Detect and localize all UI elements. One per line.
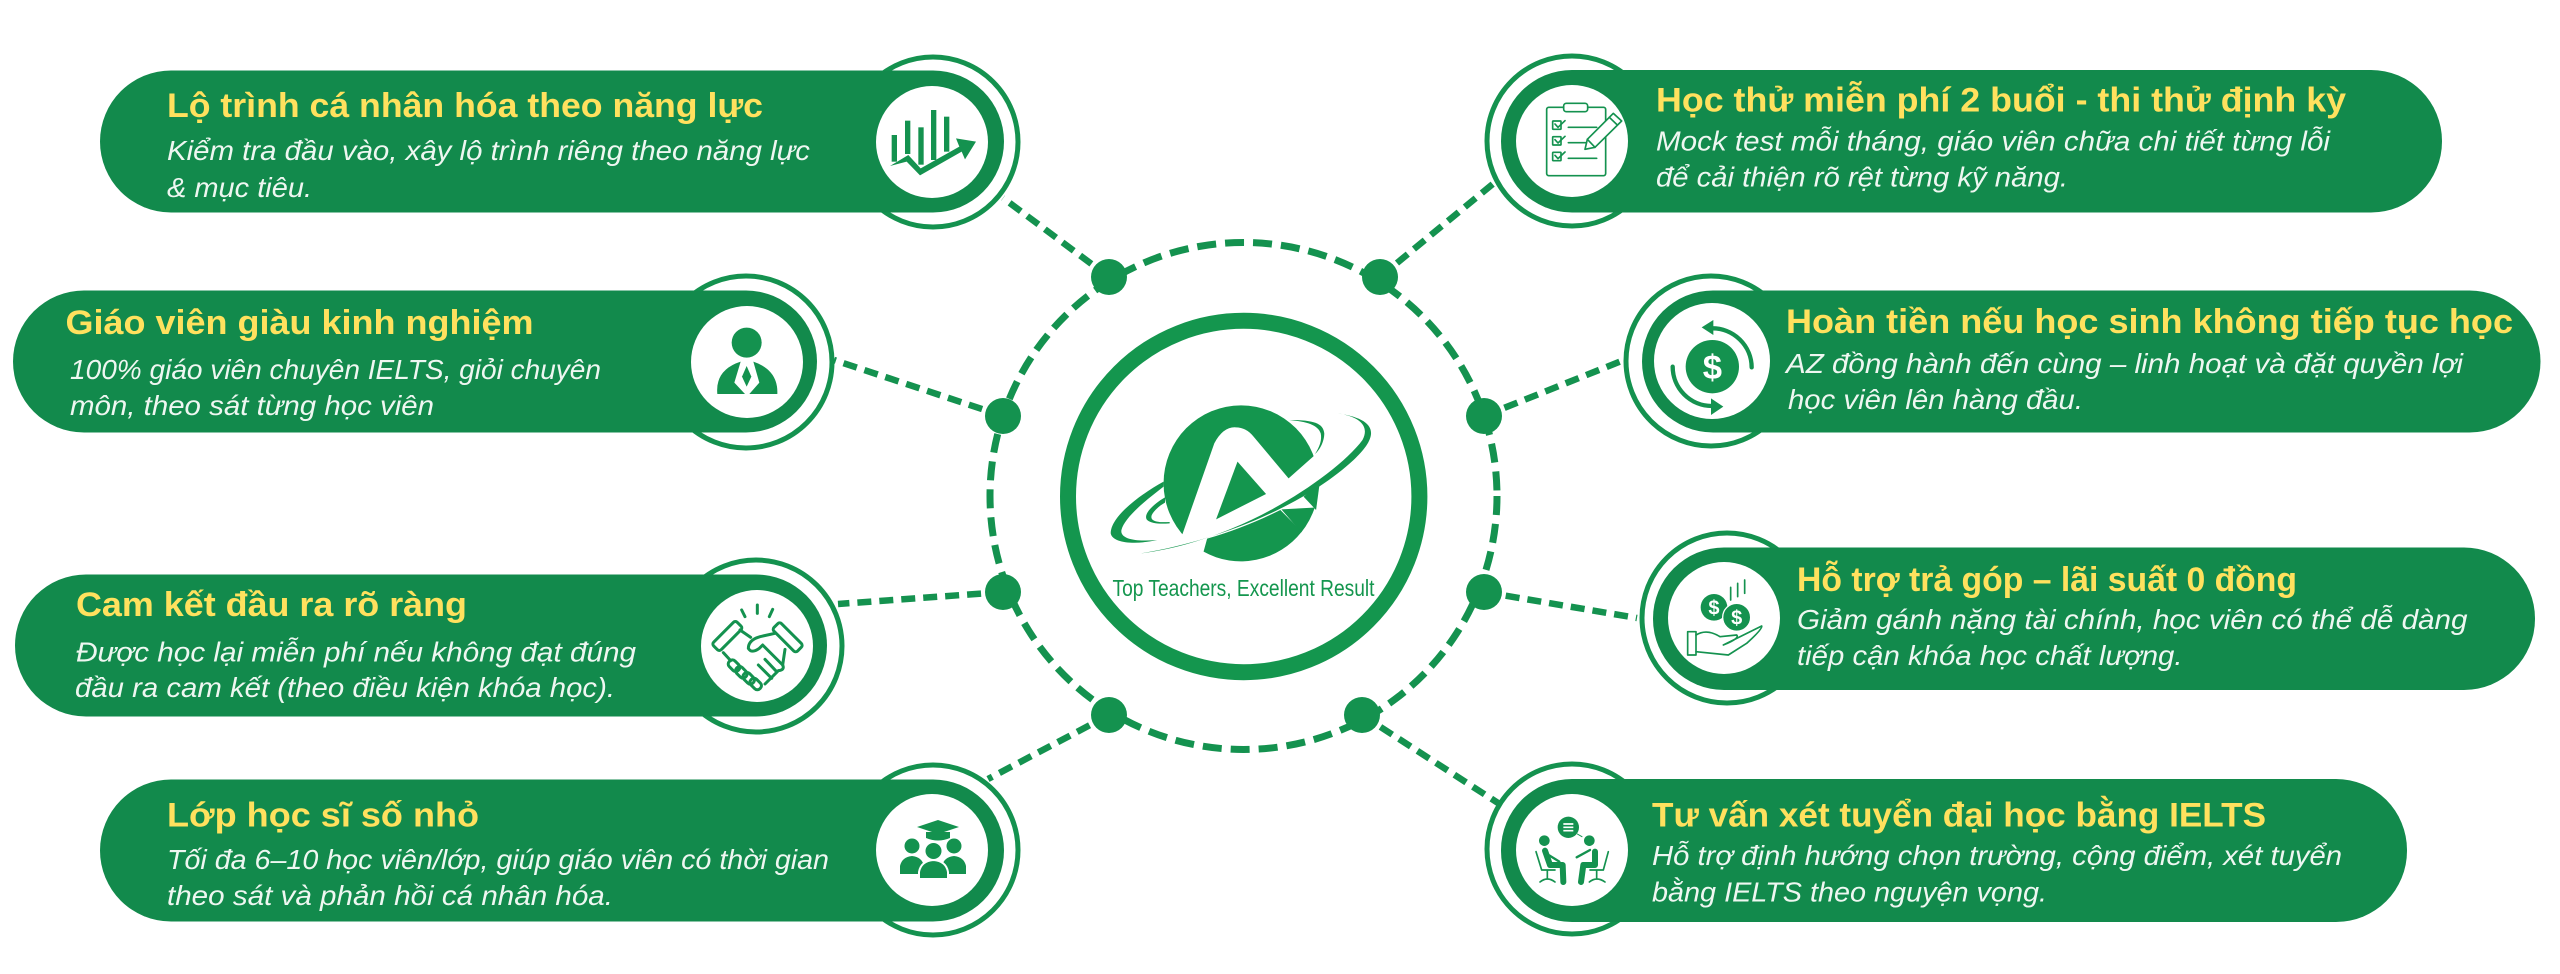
description: Kiểm tra đầu vào, xây lộ trình riêng theo năng lực <box>167 135 810 166</box>
description: & mục tiêu. <box>167 172 312 203</box>
description: 100% giáo viên chuyên IELTS, giỏi chuyên <box>70 354 601 385</box>
description: theo sát và phản hồi cá nhân hóa. <box>167 880 613 911</box>
panel: installment support <box>1642 533 2535 703</box>
description: bằng IELTS theo nguyện vọng. <box>1652 876 2047 908</box>
description: Mock test mỗi tháng, giáo viên chữa chi tiết từng lỗi <box>1656 126 2331 156</box>
panel: personalised roadmap <box>100 57 1018 227</box>
dashed connectors from hub to panels <box>834 183 1637 803</box>
description: môn, theo sát từng học viên <box>70 390 434 421</box>
icon: coins in hand: $ <box>1731 608 1742 630</box>
heading: Tư vấn xét tuyển đại học bằng IELTS <box>1652 796 2266 834</box>
icon: coins in hand <box>1688 580 1762 655</box>
icon: consultation <box>1536 817 1608 882</box>
description: học viên lên hàng đầu. <box>1788 384 2083 415</box>
description <box>1797 604 2468 671</box>
heading: Lớp học sĩ số nhỏ <box>167 796 479 834</box>
description <box>1652 840 2342 908</box>
description: AZ đồng hành đến cùng – linh hoạt và đặt quyền lợi <box>1784 348 2464 379</box>
description: Hỗ trợ định hướng chọn trường, cộng điểm, xét tuyển <box>1652 840 2342 871</box>
panel: refund policy <box>1626 276 2540 446</box>
heading: Hoàn tiền nếu học sinh không tiếp tục học <box>1786 303 2513 341</box>
icon: handshake <box>712 605 803 691</box>
heading: Cam kết đầu ra rõ ràng <box>76 586 467 624</box>
icon: money refund cycle: $ <box>1703 349 1722 387</box>
icon: rising chart <box>890 110 976 175</box>
description <box>70 354 601 421</box>
description: đầu ra cam kết (theo điều kiện khóa học). <box>75 672 615 703</box>
description: Được học lại miễn phí nếu không đạt đúng <box>76 636 636 668</box>
description: Tối đa 6–10 học viên/lớp, giúp giáo viên có thời gian <box>167 844 829 875</box>
description <box>75 636 636 703</box>
icon: money refund cycle <box>1673 320 1752 415</box>
icon: clipboard checklist <box>1547 103 1622 176</box>
logo slogan: Top Teachers, Excellent Result <box>1112 575 1375 601</box>
panel: university admission advice <box>1487 764 2407 934</box>
description <box>1656 126 2331 192</box>
description <box>167 135 810 203</box>
heading: Hỗ trợ trả góp – lãi suất 0 đồng <box>1797 561 2297 599</box>
panel: experienced teachers <box>13 276 832 448</box>
icon: students with graduation cap <box>900 820 966 879</box>
icon: teacher <box>717 328 777 394</box>
description: tiếp cận khóa học chất lượng. <box>1797 640 2182 671</box>
panel: small class size <box>100 765 1018 935</box>
panel: output commitment <box>15 560 842 732</box>
description: Giảm gánh nặng tài chính, học viên có thể dễ dàng <box>1797 604 2468 635</box>
central logo badge <box>1068 321 1419 672</box>
heading: Giáo viên giàu kinh nghiệm <box>66 304 534 342</box>
orbit nodes <box>985 259 1502 733</box>
description <box>167 844 829 911</box>
description <box>1784 348 2464 415</box>
logo mark <box>1111 405 1371 567</box>
heading: Học thử miễn phí 2 buổi - thi thử định kỳ <box>1656 82 2346 120</box>
dashed orbit ring <box>990 242 1497 750</box>
heading: Lộ trình cá nhân hóa theo năng lực <box>167 87 763 125</box>
panel: free trial lessons <box>1487 56 2442 226</box>
icon: coins in hand: $ <box>1708 598 1720 620</box>
description: để cải thiện rõ rệt từng kỹ năng. <box>1656 162 2068 192</box>
